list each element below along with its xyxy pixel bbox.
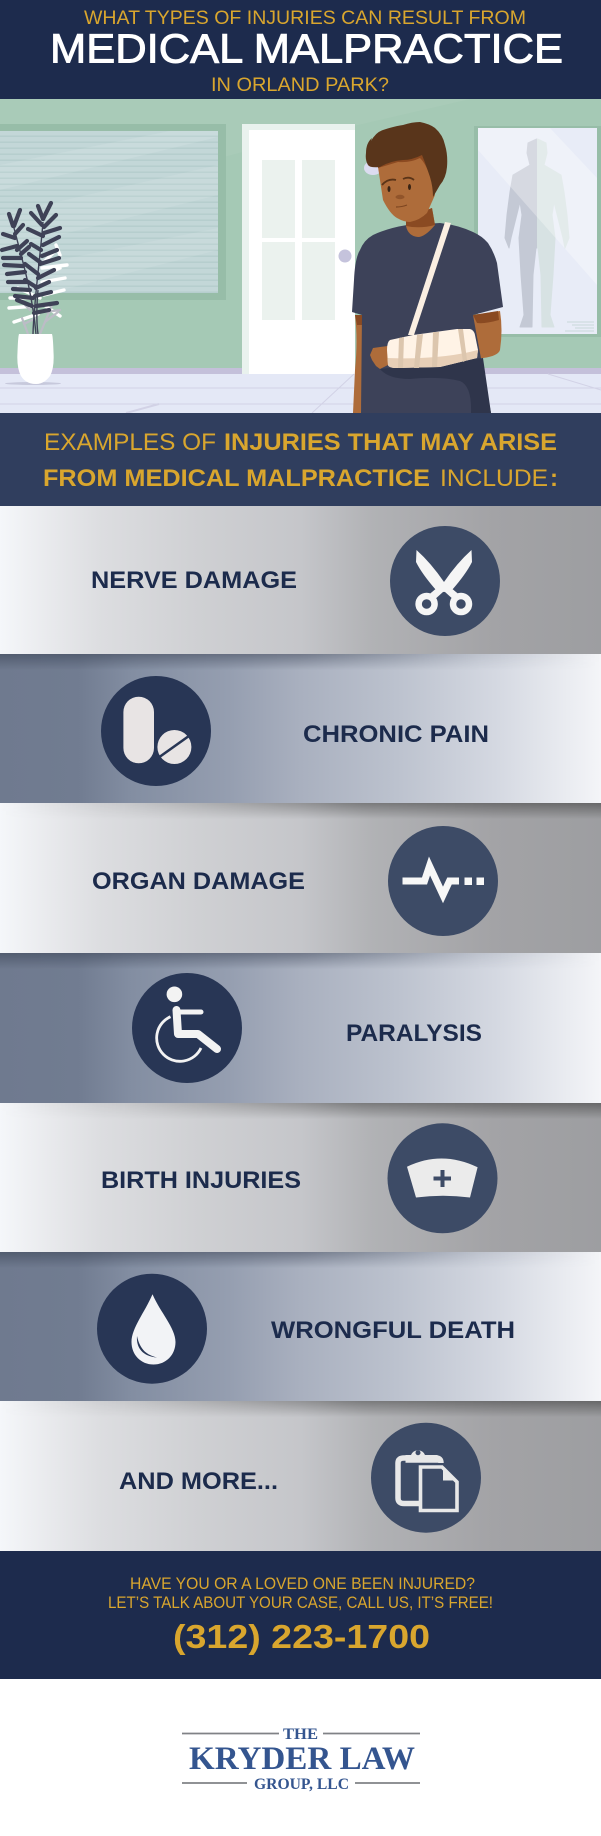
row: wrongful death [0, 1252, 601, 1401]
cast [387, 329, 478, 368]
neck [406, 208, 435, 237]
ear/headband detail [364, 161, 382, 175]
illustration: clinic scene [0, 99, 601, 413]
section heading panel [0, 413, 601, 506]
window with blinds [0, 124, 226, 300]
label: PARALYSIS [346, 1020, 482, 1047]
icon: wheelchair [132, 973, 242, 1083]
icon: heartbeat [388, 826, 498, 936]
row: birth injuries [0, 1103, 601, 1252]
icon: clipboard [371, 1423, 481, 1533]
logo: The Kryder Law Group: GROUP, LLC [254, 1776, 349, 1793]
header panel [0, 0, 601, 100]
title main: MEDICAL MALPRACTICE [50, 26, 563, 72]
section heading panel: INJURIES THAT MAY ARISE [224, 429, 557, 456]
label: CHRONIC PAIN [303, 721, 489, 748]
icon: drop [97, 1274, 207, 1384]
shirt [352, 223, 503, 413]
title line one: WHAT TYPES OF INJURIES CAN RESULT FROM [84, 7, 526, 29]
label: BIRTH INJURIES [101, 1167, 301, 1194]
wall [0, 99, 601, 369]
call to action text: HAVE YOU OR A LOVED ONE BEEN INJURED? [130, 1574, 475, 1593]
left arm [353, 315, 365, 413]
door [242, 124, 355, 374]
label: AND MORE... [119, 1468, 278, 1495]
icon: scissors [390, 526, 500, 636]
sling strap [408, 222, 451, 335]
section heading panel: EXAMPLES OF [44, 429, 216, 456]
shirt shadow [380, 358, 491, 413]
person with arm in sling [352, 122, 503, 413]
eyes, brows, nose, mouth [388, 186, 390, 192]
hair [366, 122, 447, 197]
icon: pills [101, 676, 211, 786]
row: organ damage [0, 803, 601, 953]
face [378, 155, 435, 222]
hand [370, 346, 388, 369]
label: ORGAN DAMAGE [92, 868, 305, 895]
label: WRONGFUL DEATH [271, 1317, 515, 1344]
label: NERVE DAMAGE [91, 567, 297, 594]
phone number: (312) 223-1700 [173, 1619, 430, 1656]
logo: The Kryder Law Group: THE [283, 1726, 318, 1743]
call to action panel: LET’S TALK ABOUT YOUR CASE, CALL US, IT’S FREE! [108, 1593, 493, 1612]
section heading panel: INCLUDE [440, 465, 548, 492]
right arm [470, 311, 502, 358]
section heading panel: FROM MEDICAL MALPRACTICE [43, 465, 430, 492]
row: paralysis [0, 953, 601, 1103]
icon: nurse cap [388, 1123, 498, 1233]
call to action panel [0, 1551, 601, 1679]
title line three: IN ORLAND PARK? [211, 74, 389, 96]
anatomy poster [474, 126, 601, 337]
logo: The Kryder Law Group [182, 1726, 420, 1793]
section heading panel: : [550, 465, 558, 492]
potted plant [2, 203, 67, 385]
row: and more [0, 1401, 601, 1551]
baseboard and floor [0, 368, 601, 413]
row: chronic pain [0, 654, 601, 803]
row: nerve damage [0, 506, 601, 654]
logo: The Kryder Law Group: KRYDER LAW [189, 1741, 415, 1777]
